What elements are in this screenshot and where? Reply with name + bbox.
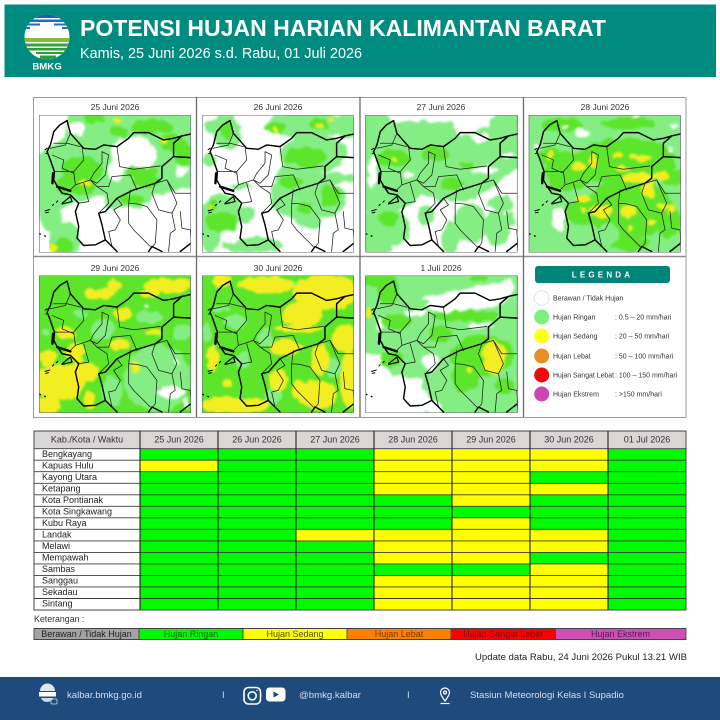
icon: website globe [39,684,57,704]
row: Sanggau [42,575,608,587]
legend: moderate rain: : 20 – 50 mm/hari [615,334,670,340]
table header: 28 Jun 2026 [388,434,438,444]
legend: light rain [534,310,672,324]
footer bar [0,677,720,720]
icon: youtube [266,688,286,702]
row: Bengkayang [42,449,608,460]
key: extreme rain [556,628,686,640]
keterangan label: Keterangan : [34,614,84,624]
row: Kubu Raya [42,518,530,529]
map date: 25 Juni 2026 [91,102,140,112]
row: Ketapang [42,483,608,495]
row: Kapuas Hulu: Kapuas Hulu [42,460,94,470]
legend: extreme rain [534,386,662,402]
legend: light rain: : 0.5 – 20 mm/hari [615,314,672,322]
row: Kayong Utara [42,472,530,483]
table header: 30 Jun 2026 [544,434,594,444]
legend: moderate rain [534,328,670,344]
legend: extreme rain: Hujan Ekstrem [553,392,599,398]
row: Mempawah: Mempawah [42,552,89,562]
rain map [39,115,191,252]
logo wordmark: BMKG [32,62,62,72]
legend: heavy rain: : 50 – 100 mm/hari [615,354,674,360]
panel: map 27 Juni 2026 [357,102,522,256]
row: Landak [42,529,608,541]
rain map [365,276,518,413]
legend: heavy rain: Hujan Lebat [553,354,591,360]
legend: no rain: Berawan / Tidak Hujan [553,296,624,302]
icon: instagram [244,688,260,704]
station name: Stasiun Meteorologi Kelas I Supadio [470,690,624,701]
key: moderate rain: Hujan Sedang [266,629,324,639]
footer bar: I [222,690,225,701]
row: Kota Pontianak [42,495,530,506]
website address: kalbar.bmkg.go.id [67,690,142,701]
row: Melawi: Melawi [42,541,70,551]
rain map [528,115,681,252]
panel: map legend [534,266,678,402]
key: very heavy rain [451,628,556,640]
row: Sekadau [42,587,608,598]
rain map [365,115,518,252]
legend: light rain: Hujan Ringan [553,314,596,322]
panel: map 25 Juni 2026 [32,102,196,258]
key: heavy rain [347,628,451,640]
key: moderate rain [243,628,347,640]
update note: Update data Rabu, 24 Juni 2026 Pukul 13.21 WIB [475,652,687,663]
table header: 27 Jun 2026 [310,434,360,444]
key: heavy rain: Hujan Lebat [375,629,424,639]
panel: map 1 Juli 2026 [359,263,522,417]
map date: 26 Juni 2026 [254,102,303,112]
subtitle: Kamis, 25 Juni 2026 s.d. Rabu, 01 Juli 2026 [80,46,362,62]
row: Kota Pontianak: Kota Pontianak [42,495,104,505]
color key bar [34,628,686,640]
legend: very heavy rain [534,368,678,382]
legend heading [535,266,670,283]
panel: map 26 Juni 2026 [200,102,357,253]
row: Kota Singkawang: Kota Singkawang [42,506,112,516]
legend: moderate rain: Hujan Sedang [553,334,597,340]
icon: location pin [440,688,450,704]
panel grid frame [33,97,686,418]
row: Sekadau: Sekadau [42,587,78,597]
legend: heavy rain [534,348,674,364]
table header: 01 Jul 2026 [624,434,670,444]
icon: BMKG logo [24,14,70,72]
legend: very heavy rain: : 100 – 150 mm/hari [615,372,678,380]
row: Kapuas Hulu [42,460,608,472]
map date: 28 Juni 2026 [581,102,630,112]
table header: 26 Jun 2026 [232,434,282,444]
panel: map 30 Juni 2026 [200,263,359,414]
legend: very heavy rain: Hujan Sangat Lebat [553,372,614,380]
panel: map 29 Juni 2026 [32,263,192,414]
legend: no rain [534,291,624,305]
row: Landak: Landak [42,530,72,540]
legend heading: LEGENDA [572,270,633,280]
row: Mempawah [42,552,530,564]
map date: 30 Juni 2026 [254,263,303,273]
table header: Kab./Kota / Waktu [51,434,123,444]
key: light rain: Hujan Ringan [164,629,218,639]
key: light rain [139,628,243,640]
map date: 1 Juli 2026 [420,263,462,273]
row: Kayong Utara: Kayong Utara [42,472,97,482]
table: rain forecast by regency [34,431,686,610]
social handle: @bmkg.kalbar [299,690,361,701]
rain map [202,276,354,413]
header banner [4,4,716,77]
table header: 25 Jun 2026 [154,434,204,444]
rain map [202,115,354,252]
row: Melawi [42,541,608,552]
key: extreme rain: Hujan Ekstrem [591,629,650,639]
key: no rain: Berawan / Tidak Hujan [41,629,132,639]
title: POTENSI HUJAN HARIAN KALIMANTAN BARAT [80,15,607,41]
row: Bengkayang: Bengkayang [42,449,92,459]
row: Ketapang: Ketapang [42,484,81,494]
table header [34,431,686,449]
table header: 29 Jun 2026 [466,434,516,444]
panel: map 28 Juni 2026 [529,102,682,252]
row: Sintang [42,598,608,610]
map date: 29 Juni 2026 [91,263,140,273]
legend: extreme rain: : >150 mm/hari [615,392,662,398]
map date: 27 Juni 2026 [417,102,466,112]
row: Sambas [42,564,608,575]
row: Kubu Raya: Kubu Raya [42,518,87,528]
rain map [39,276,191,413]
row: Sintang: Sintang [42,598,73,608]
row: Sambas: Sambas [42,564,76,574]
key: very heavy rain: Hujan Sangat Lebat [463,629,543,639]
footer bar: I [407,690,410,701]
row: Sanggau: Sanggau [42,576,78,586]
